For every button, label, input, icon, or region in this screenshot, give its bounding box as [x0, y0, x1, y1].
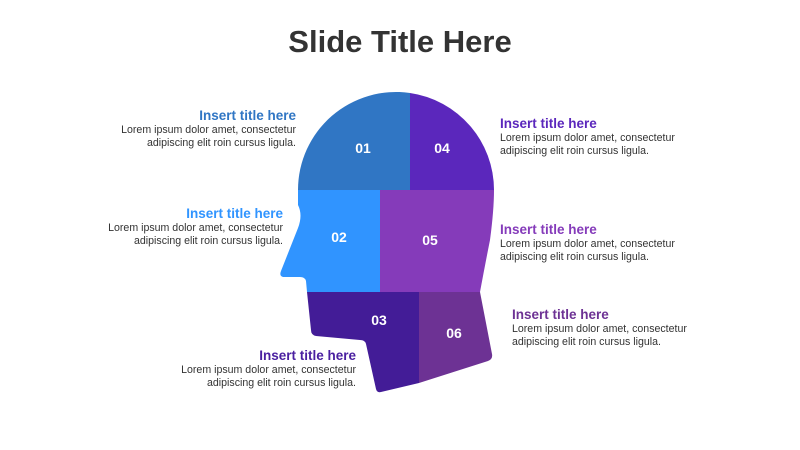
text block 01 — [121, 108, 296, 149]
segment 01: 01 — [355, 140, 371, 156]
text block 03: adipiscing elit roin cursus ligula. — [207, 377, 356, 389]
text block 01: Lorem ipsum dolor amet, consectetur — [121, 124, 296, 136]
text block 04: Insert title here — [500, 116, 597, 131]
text block 06: adipiscing elit roin cursus ligula. — [512, 336, 661, 348]
segment 02: 02 — [331, 229, 347, 245]
segment 05 — [380, 190, 494, 292]
text block 01: adipiscing elit roin cursus ligula. — [147, 137, 296, 149]
text block 06: Lorem ipsum dolor amet, consectetur — [512, 323, 687, 335]
text block 03: Lorem ipsum dolor amet, consectetur — [181, 364, 356, 376]
text block 04: adipiscing elit roin cursus ligula. — [500, 145, 649, 157]
text block 01: Insert title here — [199, 108, 296, 123]
segment 04: 04 — [434, 140, 450, 156]
text block 04: Lorem ipsum dolor amet, consectetur — [500, 132, 675, 144]
text block 02: Lorem ipsum dolor amet, consectetur — [108, 222, 283, 234]
segment 04 — [410, 93, 494, 190]
text block 02: adipiscing elit roin cursus ligula. — [134, 235, 283, 247]
segment 06: 06 — [446, 325, 462, 341]
text block 03 — [181, 348, 356, 389]
text block 04 — [500, 116, 675, 157]
title: Slide Title Here — [288, 24, 512, 59]
text block 02 — [108, 206, 283, 247]
segment 01 — [298, 92, 410, 190]
text block 05 — [500, 222, 675, 263]
segment 02 — [280, 190, 380, 292]
text block 02: Insert title here — [186, 206, 283, 221]
segment 03: 03 — [371, 312, 387, 328]
segment 05: 05 — [422, 232, 438, 248]
text block 06: Insert title here — [512, 307, 609, 322]
segment 06 — [419, 292, 492, 383]
text block 05: adipiscing elit roin cursus ligula. — [500, 251, 649, 263]
text block 06 — [512, 307, 687, 348]
text block 05: Lorem ipsum dolor amet, consectetur — [500, 238, 675, 250]
text block 05: Insert title here — [500, 222, 597, 237]
text block 03: Insert title here — [259, 348, 356, 363]
segment 03 — [307, 292, 419, 392]
